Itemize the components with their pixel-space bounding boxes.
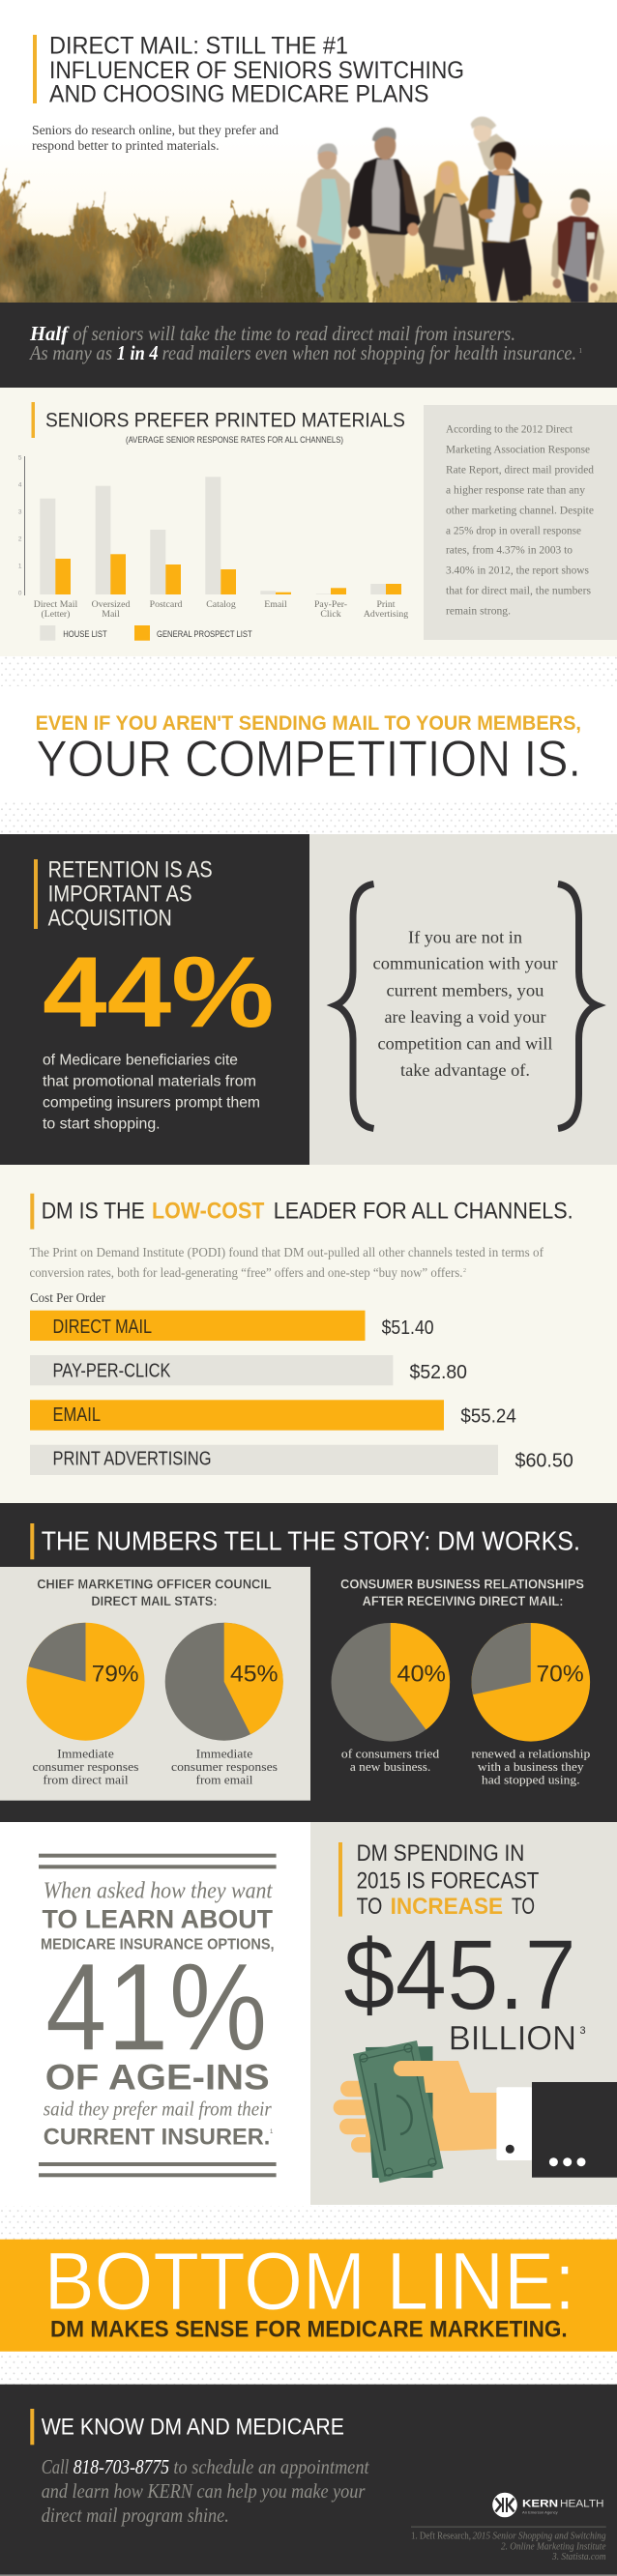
logo: Kern Health: An Emerson Agency — [522, 2510, 558, 2515]
heading: retention: ACQUISITION — [48, 906, 172, 932]
heading: DM spending: TO — [512, 1894, 535, 1920]
pie chart: 40% new business — [331, 1623, 450, 1742]
callout: 2012 DMA report: According to the 2012 Direct — [446, 424, 573, 436]
callout: 2012 DMA report: 3.40% in 2012, the report shows — [446, 565, 590, 577]
stat description: that promotional materials from — [43, 1073, 256, 1089]
band: half of seniors: 1 — [578, 347, 582, 355]
quote text: communication with your — [373, 954, 558, 973]
caption: email — [171, 1747, 278, 1787]
heading: low-cost leader: DM IS THE — [42, 1199, 145, 1225]
call to action: and learn how KERN can help you make your — [42, 2479, 366, 2503]
pie chart: 40% new business: 40% — [397, 1661, 446, 1687]
band: half of seniors: Half — [29, 322, 70, 345]
callout: 2012 DMA report: a higher response rate than any — [446, 485, 585, 497]
heading: DM spending: 2015 IS FORECAST — [357, 1867, 539, 1894]
logo: Kern Health: KERN — [522, 2498, 558, 2509]
bar: pay-per-click: PAY-PER-CLICK — [52, 1361, 171, 1382]
headline: your competition is: YOUR COMPETITION IS. — [36, 731, 581, 788]
band: half of seniors — [0, 303, 617, 388]
photo: dune grass — [0, 167, 322, 316]
heading: DM spending — [338, 1840, 539, 1920]
references — [411, 2532, 606, 2562]
bar chart: response rates: 0 — [18, 590, 22, 597]
heading: retention — [48, 857, 213, 932]
hand: thumb — [394, 2061, 470, 2093]
stat description: competing insurers prompt them — [43, 1095, 260, 1112]
bar chart: response rates: Mail — [102, 609, 120, 620]
photo: boy in varsity jacket — [551, 189, 604, 303]
caption: renewed relationship: renewed a relationship — [471, 1747, 590, 1761]
dotted band — [0, 802, 617, 834]
panel: DM spending forecast — [310, 1822, 617, 2205]
chart legend — [40, 625, 252, 641]
heading: DM spending: TO — [357, 1894, 382, 1920]
call to action: Call — [42, 2455, 69, 2478]
logo: Kern Health: HEALTH — [560, 2498, 604, 2509]
heading: seniors prefer printed materials: (AVERAGE SENIOR RESPONSE RATES FOR ALL CHANNELS) — [126, 435, 343, 445]
references: 2. Online Marketing Institute — [501, 2542, 606, 2553]
heading: direct mail still the #1: INFLUENCER OF SENIORS SWITCHING — [49, 57, 464, 84]
photo: young woman — [407, 160, 475, 302]
heading: we know DM: WE KNOW DM AND MEDICARE — [42, 2414, 344, 2440]
bar: pay-per-click: $52.80 — [410, 1362, 467, 1383]
PODI paragraph: The Print on Demand Institute (PODI) found that DM out-pulled all other channels tested in terms of — [29, 1245, 544, 1259]
caption: email: from email — [195, 1773, 253, 1787]
caption: direct mail: from direct mail — [43, 1773, 129, 1787]
hand: arm and palm — [366, 2067, 497, 2152]
stat: 44%: 44% — [43, 937, 275, 1049]
caption: renewed relationship: had stopped using. — [482, 1773, 580, 1787]
bar chart: response rates: Postcard — [150, 599, 182, 610]
money: front bill — [353, 2041, 443, 2183]
caption: new business: a new business. — [350, 1759, 430, 1774]
text: when asked: When asked how they want — [44, 1878, 274, 1903]
stat description: to start shopping. — [43, 1116, 161, 1133]
bar: direct mail — [30, 1311, 434, 1341]
text: to learn about: TO LEARN ABOUT — [43, 1904, 273, 1933]
icon: hand holding money — [334, 2041, 617, 2183]
bar chart: response rates: 3 — [18, 508, 22, 516]
heading: we know DM — [30, 2409, 344, 2445]
dotted band — [0, 656, 617, 686]
callout: 2012 DMA report: other marketing channel. Despite — [446, 506, 594, 517]
call to action — [42, 2455, 370, 2527]
text: current insurer: CURRENT INSURER. — [44, 2124, 270, 2150]
icon: right curly brace — [558, 883, 597, 1129]
references: 1. Deft Research, — [411, 2532, 471, 2542]
pie chart: 45% email: 45% — [230, 1661, 279, 1687]
bar: pay-per-click — [30, 1355, 467, 1385]
callout: 2012 DMA report: remain strong. — [446, 606, 511, 618]
bar chart: response rates — [18, 454, 408, 620]
label: cost per order: Cost Per Order — [30, 1290, 105, 1305]
heading: direct mail still the #1: AND CHOOSING MEDICARE PLANS — [49, 81, 429, 108]
text: current insurer: 1 — [270, 2129, 274, 2135]
pie chart: 45% email — [165, 1623, 283, 1741]
bar chart: response rates: 4 — [18, 481, 22, 489]
PODI paragraph: conversion rates, both for lead-generating “free” offers and one-step “buy now” offers. — [29, 1265, 462, 1280]
heading: low-cost leader — [30, 1194, 573, 1230]
caption: renewed relationship — [471, 1747, 590, 1787]
quote text: If you are not in — [408, 928, 522, 947]
heading: direct mail still the #1 — [33, 33, 464, 108]
heading: seniors prefer printed materials: SENIORS PREFER PRINTED MATERIALS — [45, 410, 405, 432]
references: 2015 Senior Shopping and Switching — [472, 2532, 605, 2542]
heading: seniors prefer printed materials — [31, 402, 405, 445]
heading: DM spending: DM SPENDING IN — [357, 1840, 524, 1867]
heading: low-cost leader: LEADER FOR ALL CHANNELS. — [274, 1199, 573, 1225]
sub-panel: CMO council stats: DIRECT MAIL STATS: — [91, 1593, 218, 1608]
pie chart: 70% renewed — [472, 1623, 590, 1742]
intro text: respond better to printed materials. — [32, 138, 220, 153]
quote text — [373, 928, 558, 1080]
PODI paragraph: 2 — [463, 1268, 466, 1274]
text: of age-ins: OF AGE-INS — [45, 2058, 270, 2098]
stat description — [43, 1053, 260, 1133]
sub-panel: consumer business relationships: AFTER RECEIVING DIRECT MAIL: — [363, 1593, 564, 1608]
caption: new business: of consumers tried — [341, 1747, 440, 1761]
panel: retention is as important as acquisition — [0, 834, 309, 1165]
heading: DM spending: INCREASE — [391, 1894, 503, 1920]
bar: email: $55.24 — [460, 1406, 516, 1428]
chart legend: HOUSE LIST — [63, 629, 107, 640]
quote text: are leaving a void your — [385, 1007, 546, 1027]
callout: 2012 DMA report — [424, 405, 617, 640]
heading: retention: RETENTION IS AS — [48, 857, 213, 883]
panel: seniors prefer printed materials — [0, 388, 617, 656]
heading: direct mail still the #1: DIRECT MAIL: STILL THE #1 — [49, 33, 348, 60]
bar: print advertising: PRINT ADVERTISING — [52, 1449, 211, 1470]
intro text — [32, 123, 279, 153]
bar chart: response rates: 2 — [18, 535, 22, 543]
photo: father carrying child on shoulders — [467, 117, 543, 302]
heading: retention: IMPORTANT AS — [48, 882, 192, 908]
quote text: competition can and will — [377, 1034, 553, 1054]
dotted band — [0, 2206, 617, 2240]
PODI paragraph — [29, 1245, 544, 1280]
stat: 41%: 41% — [45, 1938, 268, 2077]
bar chart: response rates: Email — [264, 599, 287, 610]
text: medicare insurance options: MEDICARE INSURANCE OPTIONS, — [41, 1937, 275, 1954]
caption: new business — [341, 1747, 440, 1774]
banner: bottom line: BOTTOM LINE: — [44, 2236, 575, 2327]
panel: the numbers tell the story — [0, 1503, 617, 1822]
suit sleeve — [532, 2082, 617, 2178]
references: 3. Statista.com — [551, 2552, 605, 2562]
band: half of seniors: 1 in 4 — [117, 341, 159, 364]
callout: 2012 DMA report: rates, from 4.37% in 2003 to — [446, 545, 573, 557]
bar chart: response rates: Direct Mail — [34, 599, 77, 610]
sub-panel: consumer business relationships — [331, 1576, 590, 1787]
intro text: Seniors do research online, but they prefer and — [32, 123, 279, 137]
bar: direct mail: DIRECT MAIL — [52, 1317, 152, 1338]
quote text: take advantage of. — [400, 1060, 530, 1080]
money: back bill — [366, 2046, 433, 2178]
stat: billion: BILLION — [449, 2020, 576, 2058]
callout: 2012 DMA report: Rate Report, direct mail provided — [446, 465, 594, 477]
panel: 41% of age-ins — [39, 1854, 277, 2177]
bar: email: EMAIL — [52, 1404, 101, 1426]
pie chart: 79% direct mail: 79% — [92, 1661, 139, 1687]
callout: 2012 DMA report: a 25% drop in overall response — [446, 526, 581, 537]
caption: email: Immediate — [196, 1747, 253, 1761]
photo: foreground grass — [283, 244, 617, 316]
chart legend: GENERAL PROSPECT LIST — [157, 629, 252, 640]
band: half of seniors: of seniors will take the time to read direct mail from insurers. — [73, 322, 515, 345]
sub-panel: CMO council stats — [0, 1567, 310, 1801]
bar chart: response rates: Oversized — [92, 599, 130, 610]
bar: email — [30, 1400, 516, 1431]
bar: print advertising — [30, 1445, 573, 1475]
heading: low-cost leader: LOW-COST — [152, 1199, 265, 1225]
quote text: current members, you — [387, 981, 544, 1000]
stat description: of Medicare beneficiaries cite — [43, 1053, 238, 1069]
bar chart: response rates: Advertising — [364, 609, 408, 620]
bar chart: response rates: 1 — [18, 563, 22, 570]
caption: email: consumer responses — [171, 1759, 278, 1774]
bar: direct mail: $51.40 — [382, 1317, 434, 1339]
callout: 2012 DMA report: Marketing Association Response — [446, 445, 590, 456]
text: said they prefer: said they prefer mail from their — [44, 2097, 272, 2120]
bar chart: response rates: Click — [320, 609, 341, 620]
headline: your competition is: EVEN IF YOU AREN'T SENDING MAIL TO YOUR MEMBERS, — [36, 712, 581, 735]
call to action: 818-703-8775 — [73, 2455, 169, 2478]
photo: grandmother — [297, 143, 351, 297]
caption: renewed relationship: with a business they — [478, 1759, 584, 1774]
sub-panel: consumer business relationships: CONSUMER BUSINESS RELATIONSHIPS — [340, 1576, 584, 1591]
pie chart: 70% renewed: 70% — [536, 1661, 584, 1687]
heading: the numbers tell the story: THE NUMBERS TELL THE STORY: DM WORKS. — [42, 1525, 580, 1555]
panel: low-cost leader — [0, 1165, 617, 1503]
caption: direct mail — [33, 1747, 139, 1787]
dotted band — [0, 2352, 617, 2385]
caption: direct mail: consumer responses — [33, 1759, 139, 1774]
bar chart: response rates: 5 — [18, 454, 22, 462]
sub-panel: CMO council stats: CHIEF MARKETING OFFICER COUNCIL — [37, 1576, 272, 1591]
bar chart: response rates: Print — [376, 599, 396, 610]
bar: print advertising: $60.50 — [514, 1451, 573, 1472]
callout: 2012 DMA report: that for direct mail, the numbers — [446, 586, 592, 597]
caption: direct mail: Immediate — [57, 1747, 114, 1761]
icon: left curly brace — [336, 883, 373, 1129]
stat: billion: 3 — [580, 2025, 586, 2037]
banner: bottom line: DM MAKES SENSE FOR MEDICARE MARKETING. — [50, 2316, 568, 2342]
panel: void quote — [309, 834, 617, 1165]
stat: $45.7: $45.7 — [343, 1919, 576, 2030]
photo: family of six — [297, 117, 604, 303]
logo: Kern Health — [492, 2493, 604, 2517]
pie chart: 79% direct mail — [27, 1623, 145, 1741]
band: half of seniors: As many as — [28, 341, 112, 364]
hero photo: family walking through grass at sunset — [0, 0, 617, 316]
photo: grandfather — [347, 128, 421, 298]
bar chart: response rates: (Letter) — [42, 609, 70, 620]
bar chart: response rates: Pay-Per- — [314, 599, 347, 610]
suit cuff — [496, 2087, 532, 2160]
call to action: to schedule an appointment — [173, 2455, 370, 2478]
bar chart: response rates: Catalog — [206, 599, 236, 610]
call to action: direct mail program shine. — [42, 2504, 229, 2527]
panel: we know DM and Medicare — [0, 2385, 617, 2576]
